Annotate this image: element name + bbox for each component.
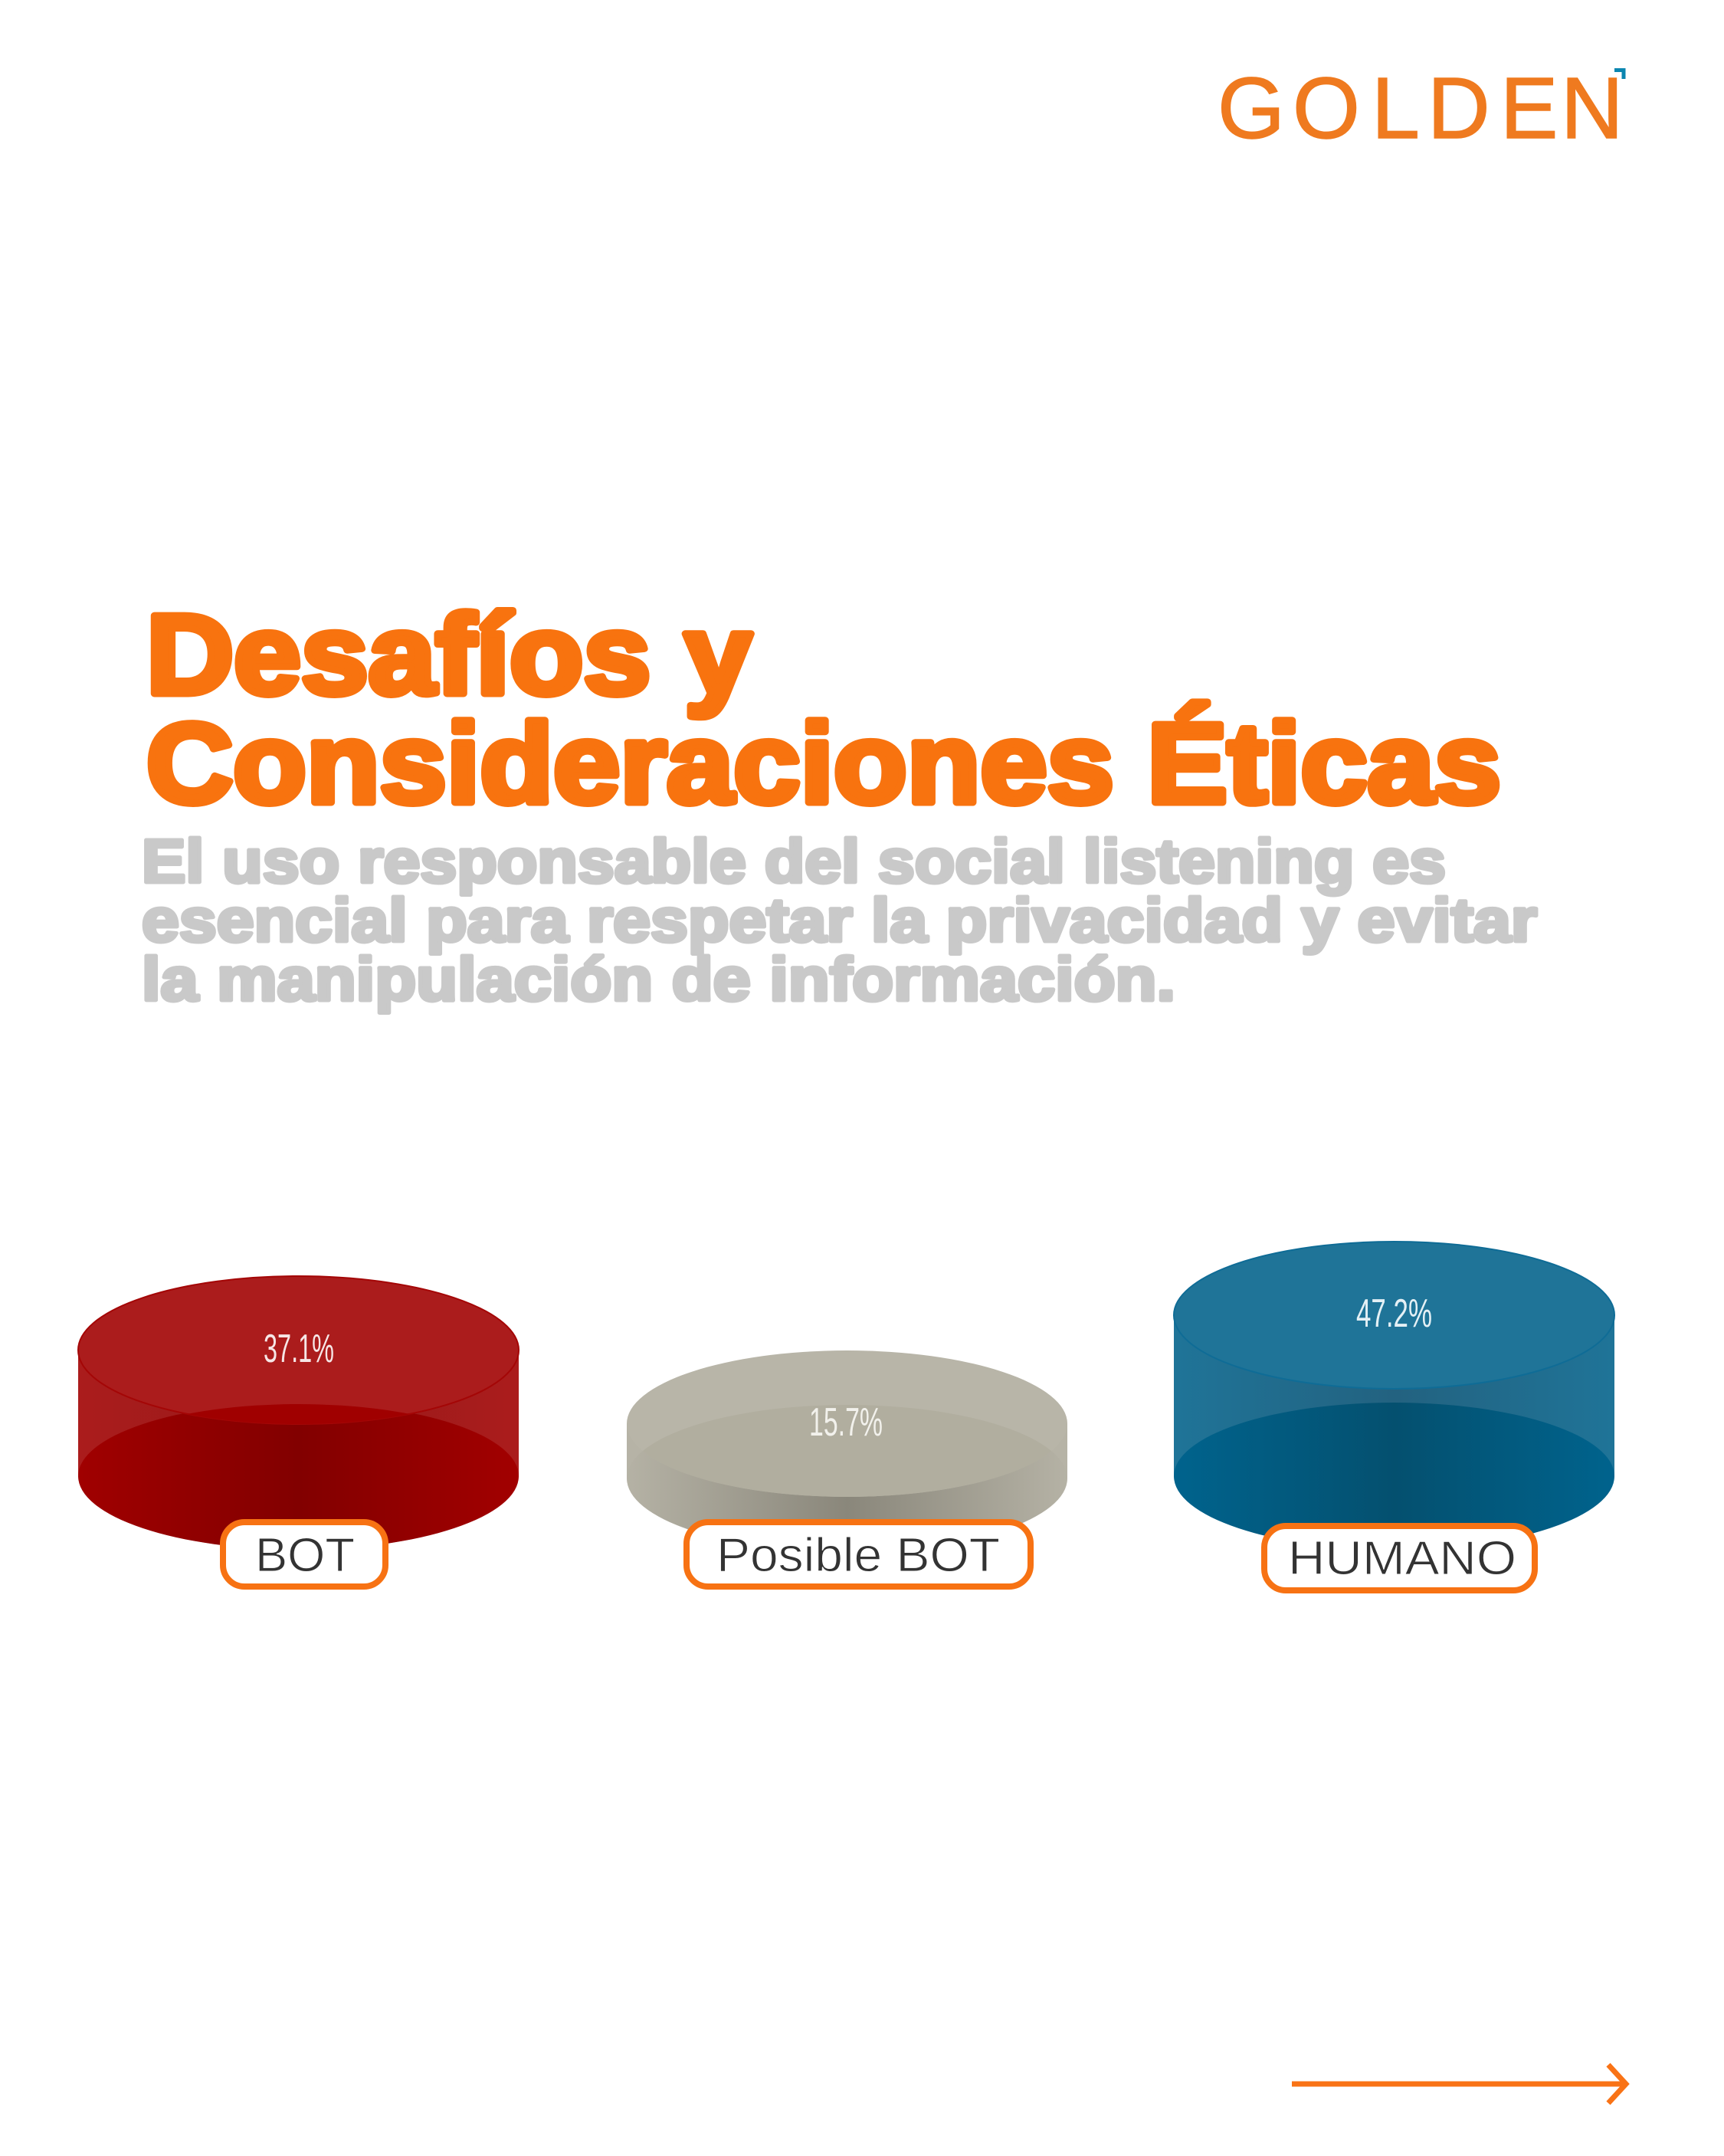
cylinder: HUMANO 47.2% xyxy=(1174,1242,1614,1550)
arrow xyxy=(1292,2065,1626,2103)
logo: GOLDEN: GOLDEN xyxy=(1218,60,1624,156)
subtitle text block: la manipulación de información. xyxy=(142,945,1175,1013)
cylinder: BOT 37.1% xyxy=(78,1276,519,1550)
label: HUMANO xyxy=(1264,1526,1535,1590)
label: BOT: BOT xyxy=(255,1529,355,1582)
subtitle text block: esencial para respetar la privacidad y evitar xyxy=(142,886,1537,954)
label: HUMANO: HUMANO xyxy=(1288,1532,1516,1585)
cylinder: HUMANO 47.2%: 47.2% xyxy=(1356,1291,1432,1336)
cylinder: Posible BOT 15.7%: 15.7% xyxy=(809,1400,883,1445)
title: Desafíos y xyxy=(146,592,752,718)
cylinder: BOT 37.1%: 37.1% xyxy=(264,1327,334,1371)
title xyxy=(146,592,1501,827)
label: BOT xyxy=(223,1522,385,1587)
chart: cylinders xyxy=(78,1242,1614,1590)
label: Posible BOT xyxy=(687,1522,1031,1587)
subtitle text block: El uso responsable del social listening es xyxy=(142,827,1446,895)
label: Posible BOT: Posible BOT xyxy=(716,1529,1000,1582)
title: Consideraciones Éticas xyxy=(146,701,1501,827)
cylinder: Posible BOT 15.7% xyxy=(627,1350,1067,1530)
subtitle text block xyxy=(142,827,1537,1013)
